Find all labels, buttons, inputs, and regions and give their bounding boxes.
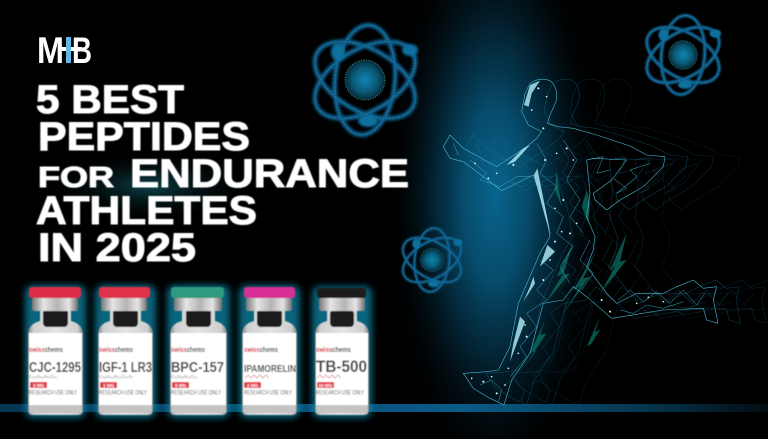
- title: PEPTIDES: [38, 115, 250, 159]
- vial: BPC-157: [170, 287, 227, 415]
- vial: IGF-1 LR3: C₃₉₉H₆₂₁N₁₁₁O₁₁₇S₇: [99, 374, 133, 379]
- front runner: [443, 79, 718, 405]
- vial glow halos: [25, 285, 372, 418]
- vial: CJC-1295: [28, 287, 83, 415]
- vial: TB-500: TB-500: [316, 357, 367, 376]
- icon: lower atom: [395, 227, 469, 293]
- vial: TB-500: RESEARCH USE ONLY: [316, 390, 364, 396]
- title: [36, 78, 409, 270]
- vial: CJC-1295: CJC-1295: [29, 360, 81, 376]
- bright edge highlights: [507, 81, 555, 362]
- title: 5 BEST: [36, 78, 184, 122]
- logo: MHB: M: [37, 30, 64, 71]
- vial: IGF-1 LR3: [98, 287, 153, 415]
- green lightning shards: [522, 170, 627, 370]
- title: ENDURANCE: [130, 152, 409, 196]
- runner figure with motion trail: [443, 79, 768, 405]
- vial: IPAMORELIN: swisschems: [244, 345, 278, 354]
- vial: IGF-1 LR3: RESEARCH USE ONLY: [99, 390, 147, 396]
- title: IN 2025: [38, 226, 196, 270]
- vial: BPC-157: swisschems: [171, 345, 205, 354]
- background glow behind runner: [385, 0, 605, 439]
- vial: IGF-1 LR3: IGF-1 LR3: [99, 360, 152, 376]
- vial: IPAMORELIN: IPAMORELIN: [244, 363, 296, 375]
- vial: IPAMORELIN: 2 MG: [247, 383, 259, 388]
- icon: upper right atom: [638, 14, 728, 96]
- vial: BPC-157: 5 MG: [175, 383, 187, 388]
- vial: TB-500: swisschems: [316, 345, 351, 354]
- vial: BPC-157: BPC-157: [171, 360, 224, 376]
- icon: large atom: [302, 23, 428, 137]
- title: FOR: [38, 162, 114, 194]
- logo: MHB: [37, 30, 92, 71]
- vial: CJC-1295: swisschems: [29, 345, 63, 354]
- vial: IPAMORELIN: RESEARCH USE ONLY: [244, 390, 292, 396]
- vial: IPAMORELIN: [242, 287, 297, 415]
- floor light strip: [0, 404, 768, 412]
- title: ATHLETES: [36, 189, 257, 233]
- logo: MHB: B: [72, 30, 92, 71]
- vial: BPC-157: RESEARCH USE ONLY: [171, 390, 221, 396]
- vial: CJC-1295: 2 MG: [33, 383, 45, 388]
- vial: TB-500: [315, 288, 369, 415]
- vial: CJC-1295: RESEARCH USE ONLY: [29, 390, 77, 396]
- vial: IGF-1 LR3: 1 MG: [103, 383, 115, 388]
- sparkle dots: [471, 87, 664, 394]
- vial: IGF-1 LR3: swisschems: [99, 345, 133, 354]
- vial: BPC-157: C₆₂H₉₈N₁₆O₂₂: [171, 374, 197, 379]
- vial: CJC-1295: C₁₅₂H₂₅₂N₄₄O₄₂: [29, 374, 57, 379]
- vial: TB-500: 10 MG: [318, 383, 333, 388]
- teal glow behind title: [45, 150, 255, 222]
